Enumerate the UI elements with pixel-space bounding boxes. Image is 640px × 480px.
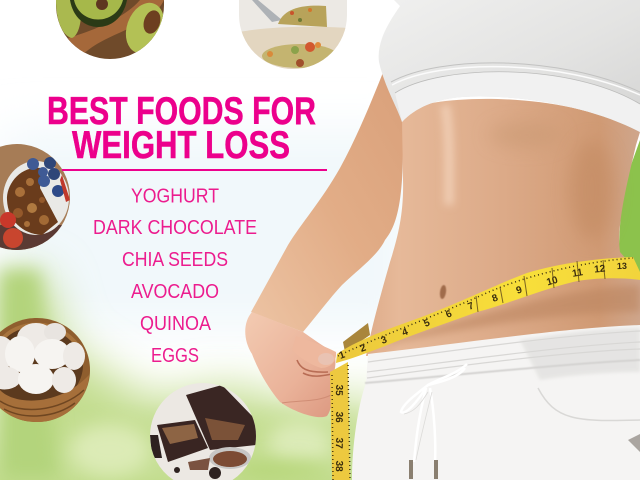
tape measure horizontal: 1 (338, 349, 347, 362)
tape measure vertical: 36 (333, 411, 344, 423)
tape measure vertical: 37 (333, 437, 344, 449)
torso shading (385, 105, 640, 345)
tape measure horizontal: 6 (444, 308, 454, 321)
navel (439, 285, 447, 299)
tape measure horizontal: 3 (380, 334, 389, 347)
hand (245, 312, 335, 417)
list of foods: YOGHURT (131, 184, 219, 208)
tape measure horizontal: 11 (571, 267, 584, 280)
tape measure horizontal: 9 (515, 284, 524, 297)
tape measure vertical: 35 (333, 384, 344, 396)
list of foods: CHIA SEEDS (122, 248, 228, 271)
list of foods: DARK CHOCOLATE (93, 216, 257, 239)
tape measure horizontal: 13 (617, 261, 627, 271)
title: BEST FOODS FOR (47, 90, 316, 133)
arm (251, 70, 403, 332)
white shorts (352, 325, 640, 480)
tape measure horizontal: 2 (359, 342, 368, 355)
divider rule (62, 169, 327, 171)
list of foods: QUINOA (140, 312, 211, 335)
tape measure horizontal: 4 (401, 326, 410, 339)
title: WEIGHT LOSS (72, 124, 290, 167)
list of foods: EGGS (151, 344, 199, 367)
food photo: dark chocolate (150, 383, 256, 480)
food photo: yoghurt with granola (0, 144, 72, 250)
food photo: avocado (56, 0, 164, 59)
bare torso (366, 99, 640, 356)
food photo: quinoa (239, 0, 347, 70)
list of foods: AVOCADO (131, 280, 219, 303)
photo: woman's torso with arm, top, shorts and tape (245, 0, 640, 480)
food photo: eggs in basket (0, 318, 90, 422)
tape measure horizontal (336, 257, 640, 363)
thumb and finger lines (282, 336, 336, 403)
tape measure vertical: 38 (333, 460, 344, 472)
tape measure horizontal: 8 (491, 292, 500, 305)
tape measure horizontal: 10 (545, 275, 560, 288)
tape measure horizontal: 5 (422, 317, 432, 330)
list of foods (93, 184, 257, 367)
eggs (0, 323, 85, 394)
drawstring (401, 364, 467, 479)
tape measure fold (343, 323, 370, 352)
sports top (379, 0, 640, 132)
tape measure horizontal: 12 (594, 263, 606, 276)
title (47, 90, 316, 167)
tape measure horizontal: 7 (466, 300, 476, 313)
tape measure vertical (330, 362, 350, 480)
